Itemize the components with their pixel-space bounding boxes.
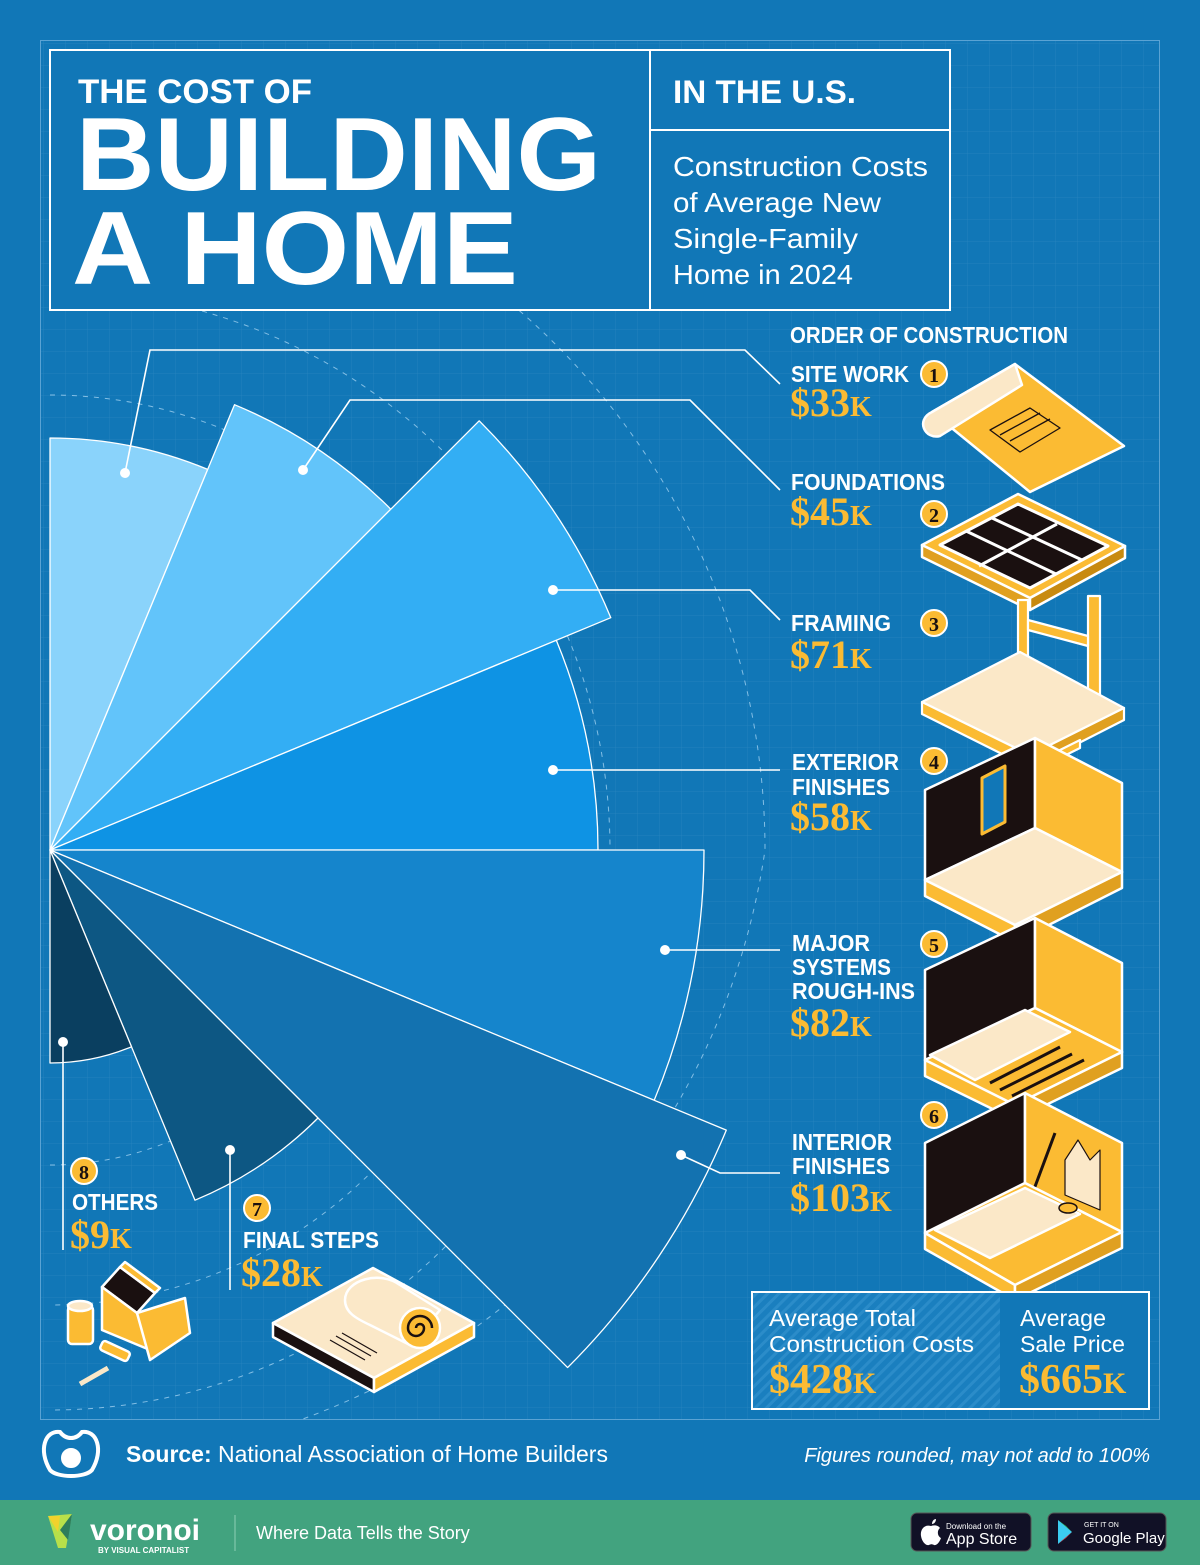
- title block: [50, 50, 950, 310]
- subtitle: Construction Costs: [673, 151, 928, 182]
- subtitle: Home in 2024: [673, 259, 853, 290]
- subtitle: [673, 74, 928, 290]
- badge: app store: App Store: [946, 1531, 1017, 1548]
- illustration: insulation roll: [273, 1268, 474, 1392]
- badges: 2: [929, 505, 939, 527]
- illustration: interior finishes box: [925, 1093, 1122, 1300]
- label: major systems: SYSTEMS: [792, 954, 891, 980]
- wedge: site work: [50, 438, 208, 850]
- subtitle: of Average New: [673, 187, 882, 218]
- badges: 3: [929, 614, 939, 636]
- wedge: major systems: [50, 850, 704, 1100]
- average sale price: Sale Price: [1020, 1331, 1125, 1357]
- label: site work: $33K: [790, 380, 872, 425]
- label: final steps: FINAL STEPS: [243, 1227, 379, 1253]
- total construction costs: Average Total: [769, 1305, 916, 1331]
- title: BUILDING: [76, 97, 601, 213]
- label: major systems: $82K: [790, 1000, 872, 1045]
- label: site work: [790, 361, 909, 425]
- icon: source logo: [44, 1432, 98, 1476]
- badge: app store: Download on the: [946, 1522, 1007, 1531]
- title: THE COST OF: [78, 73, 312, 111]
- badges: 6: [929, 1106, 939, 1128]
- footer: Where Data Tells the Story: [256, 1523, 470, 1543]
- label: others: OTHERS: [72, 1189, 158, 1215]
- badges: 4: [929, 752, 939, 774]
- source line: Figures rounded, may not add to 100%: [804, 1445, 1150, 1467]
- subtitle: IN THE U.S.: [673, 74, 856, 110]
- illustration: framing: [922, 596, 1124, 768]
- logo: voronoi: voronoi: [90, 1514, 200, 1547]
- label: final steps: [241, 1227, 379, 1295]
- label: framing: FRAMING: [791, 610, 891, 636]
- title: [72, 73, 601, 307]
- badge: app store: [911, 1513, 1031, 1551]
- badges: 5: [929, 935, 939, 957]
- wedge: interior finishes: [50, 850, 726, 1368]
- logo: voronoi: BY VISUAL CAPITALIST: [98, 1546, 189, 1555]
- average sale price: Average: [1020, 1305, 1106, 1331]
- badges: 1: [929, 365, 939, 387]
- label: exterior finishes: EXTERIOR: [792, 749, 899, 775]
- badge: google play: Google Play: [1083, 1530, 1165, 1547]
- badges: 8: [79, 1162, 89, 1184]
- illustration: blueprint: [923, 364, 1124, 492]
- wedge: others: [50, 850, 132, 1063]
- label: interior finishes: INTERIOR: [792, 1129, 892, 1155]
- label: framing: $71K: [790, 632, 872, 677]
- label: others: $9K: [70, 1212, 132, 1257]
- label: framing: [790, 610, 891, 677]
- logo: voronoi: [48, 1514, 200, 1555]
- badges: 7: [252, 1199, 262, 1221]
- average sale price: [1019, 1305, 1127, 1403]
- total construction costs: $428K: [769, 1357, 877, 1403]
- source line: [44, 1432, 1150, 1476]
- total construction costs: [769, 1305, 974, 1403]
- label: interior finishes: $103K: [790, 1175, 892, 1220]
- illustration: foundation: [922, 494, 1125, 610]
- label: major systems: ROUGH-INS: [792, 978, 915, 1004]
- title: A HOME: [72, 191, 518, 307]
- label: major systems: [790, 930, 915, 1045]
- chart: radial wedges: [50, 405, 726, 1368]
- illustration: exterior finishes box: [925, 738, 1122, 942]
- leader lines: [63, 350, 780, 1290]
- label: site work: SITE WORK: [791, 361, 909, 387]
- wedge: framing: [50, 421, 611, 850]
- dashed guide arcs: [50, 158, 765, 1420]
- footer: [0, 1500, 1200, 1565]
- label: foundations: [790, 469, 945, 534]
- illustration: major systems box: [925, 918, 1122, 1120]
- wedge: foundations: [50, 405, 391, 850]
- badges: [71, 361, 947, 1221]
- totals box: [752, 1292, 1149, 1409]
- label: exterior finishes: [790, 749, 899, 839]
- average sale price: $665K: [1019, 1357, 1127, 1403]
- label: foundations: FOUNDATIONS: [791, 469, 945, 495]
- label: interior finishes: FINISHES: [792, 1153, 890, 1179]
- label: foundations: $45K: [790, 489, 872, 534]
- heading: order of construction: ORDER OF CONSTRUCTION: [790, 322, 1068, 348]
- badge: google play: [1048, 1513, 1166, 1551]
- total construction costs: Construction Costs: [769, 1331, 974, 1357]
- wedge: final steps: [50, 850, 318, 1200]
- badge: google play: GET IT ON: [1084, 1522, 1119, 1529]
- label: interior finishes: [790, 1129, 892, 1220]
- wedge: exterior finishes: [50, 640, 598, 850]
- label: exterior finishes: FINISHES: [792, 774, 890, 800]
- source line: Source: National Association of Home Builders: [126, 1441, 608, 1467]
- illustration: toolbox: [68, 1262, 190, 1384]
- label: final steps: $28K: [241, 1250, 323, 1295]
- label: exterior finishes: $58K: [790, 794, 872, 839]
- subtitle: Single-Family: [673, 223, 858, 254]
- label: major systems: MAJOR: [792, 930, 870, 956]
- labels: [70, 361, 945, 1295]
- label: others: [70, 1189, 158, 1257]
